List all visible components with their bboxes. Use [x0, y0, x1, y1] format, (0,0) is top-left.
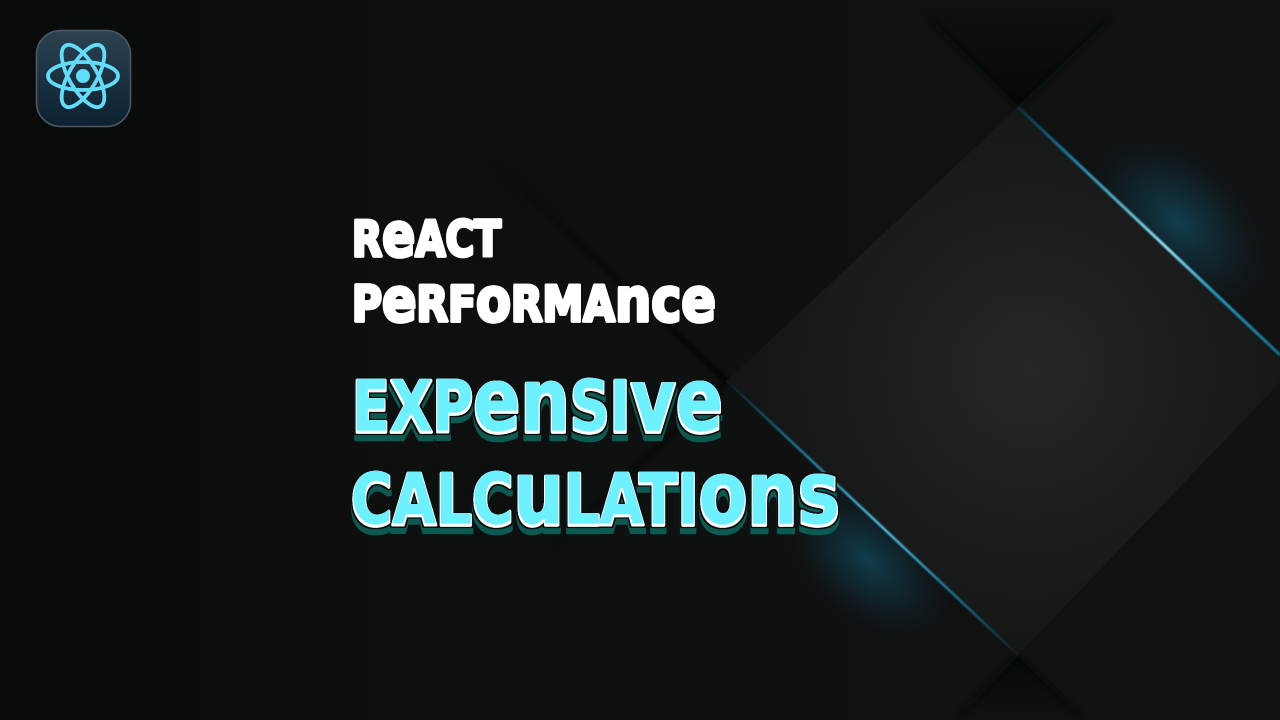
subtitle: Expensive: EXPenSIve: [352, 350, 723, 453]
title: React: ReACT: [352, 200, 501, 271]
accent line: lower centre: [727, 381, 1018, 655]
icon: React logo: [36, 30, 130, 126]
subtitle: Calculations: CALCuLATIons: [351, 443, 840, 546]
title: Performance: PeRFoRMAnce: [352, 265, 716, 336]
central diamond panel: [727, 107, 1280, 655]
accent line: upper right: [1018, 107, 1280, 355]
glow: lower centre: [749, 443, 987, 677]
glow: upper right: [1047, 93, 1280, 351]
